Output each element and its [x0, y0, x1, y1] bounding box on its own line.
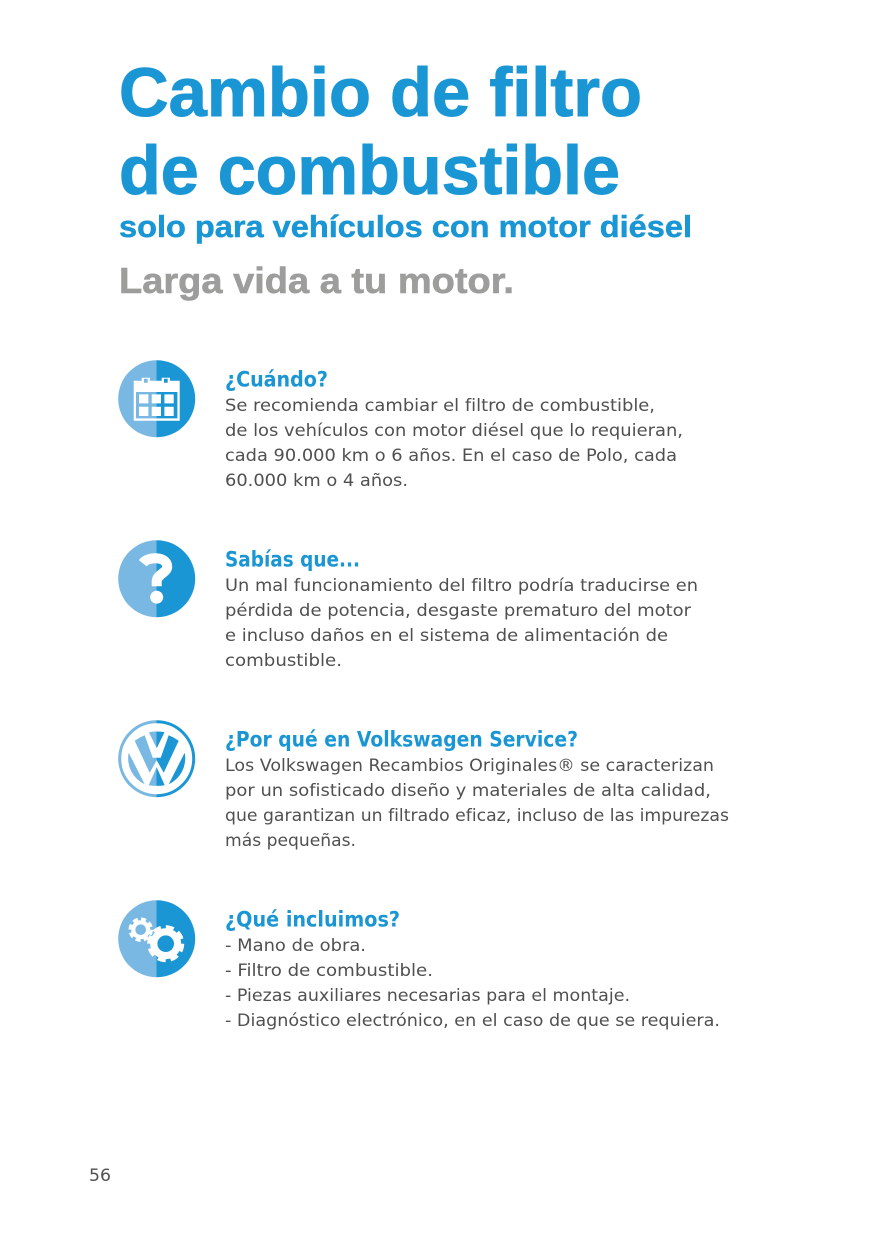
section: cuándo: 60.000 km o 4 años.: [225, 471, 408, 491]
section: sabías que: Sabías que...: [225, 548, 360, 572]
section: sabías que: [225, 548, 698, 671]
section: cuándo: cada 90.000 km o 6 años. En el caso de Polo, cada: [225, 446, 677, 466]
section: cuándo: ¿Cuándo?: [225, 368, 328, 392]
icon: question mark: [118, 540, 195, 617]
section: por qué: que garantizan un filtrado eficaz, incluso de las impurezas: [225, 806, 729, 826]
section: por qué: [225, 728, 729, 851]
section: sabías que: combustible.: [225, 651, 342, 671]
tagline: Larga vida a tu motor.: [119, 260, 514, 301]
title: Cambio de filtro: [119, 54, 642, 131]
section: sabías que: e incluso daños en el sistema de alimentación de: [225, 626, 668, 646]
icon: gears: [118, 900, 195, 977]
title: [119, 54, 642, 209]
page number: 56: [89, 1166, 111, 1186]
section: por qué: más pequeñas.: [225, 831, 356, 851]
section: por qué: Los Volkswagen Recambios Originales® se caracterizan: [225, 756, 714, 776]
subtitle: solo para vehículos con motor diésel: [119, 209, 692, 244]
section: sabías que: pérdida de potencia, desgaste prematuro del motor: [225, 601, 691, 621]
section: cuándo: Se recomienda cambiar el filtro de combustible,: [225, 396, 655, 416]
section: qué incluimos: - Mano de obra.: [225, 936, 366, 956]
section: qué incluimos: ¿Qué incluimos?: [225, 908, 400, 932]
section: qué incluimos: [225, 908, 720, 1031]
section: sabías que: Un mal funcionamiento del filtro podría traducirse en: [225, 576, 698, 596]
section: qué incluimos: - Filtro de combustible.: [225, 961, 433, 981]
section: por qué: ¿Por qué en Volkswagen Service?: [225, 728, 578, 752]
section: por qué: por un sofisticado diseño y materiales de alta calidad,: [225, 781, 711, 801]
icon: Volkswagen logo: [120, 722, 194, 796]
title: de combustible: [119, 132, 620, 209]
section: cuándo: de los vehículos con motor diésel que lo requieran,: [225, 421, 683, 441]
section: qué incluimos: - Diagnóstico electrónico, en el caso de que se requiera.: [225, 1011, 720, 1031]
icon: calendar: [118, 360, 195, 437]
section: cuándo: [225, 368, 683, 491]
section: qué incluimos: - Piezas auxiliares necesarias para el montaje.: [225, 986, 630, 1006]
